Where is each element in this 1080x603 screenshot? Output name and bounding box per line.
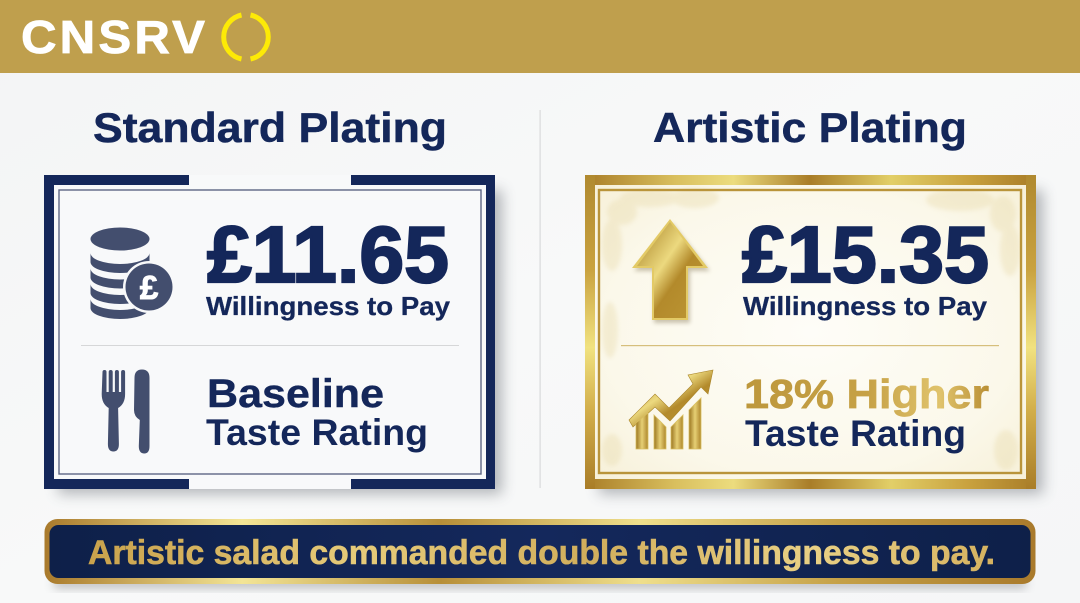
icon: gold up arrow <box>632 219 710 323</box>
label: willingness to pay: Willingness to Pay <box>743 291 988 321</box>
panel: standard plating <box>44 175 502 494</box>
panel frame <box>44 175 495 489</box>
label: baseline: Baseline <box>207 372 384 416</box>
label: taste rating: Taste Rating <box>745 413 966 454</box>
price: 11.65: £11.65 <box>207 210 449 299</box>
column divider <box>540 110 541 488</box>
gold frame <box>585 175 1036 489</box>
icon: coin stack with pound <box>90 228 175 319</box>
header bar <box>0 0 1080 73</box>
heading: Artistic Plating: Artistic Plating <box>653 104 967 151</box>
label: willingness to pay: Willingness to Pay <box>206 291 451 321</box>
heading: Standard Plating: Standard Plating <box>93 104 447 151</box>
price: 15.35: £15.35 <box>742 210 989 299</box>
icon: fork and knife <box>102 370 150 454</box>
logo wordmark: CNSRV <box>21 12 205 64</box>
label: taste rating: Taste Rating <box>206 412 428 453</box>
label: 18% higher: 18% Higher <box>744 371 989 417</box>
panel: artistic plating <box>585 175 1043 494</box>
banner text: Artistic salad commanded double the willingness to pay. <box>88 534 995 572</box>
takeaway banner <box>44 519 1036 588</box>
icon: gold rising chart <box>629 370 713 449</box>
damask ornament <box>602 188 1020 470</box>
icon: logo ring <box>224 15 268 59</box>
icon: coin stack with pound: £ <box>140 269 159 306</box>
